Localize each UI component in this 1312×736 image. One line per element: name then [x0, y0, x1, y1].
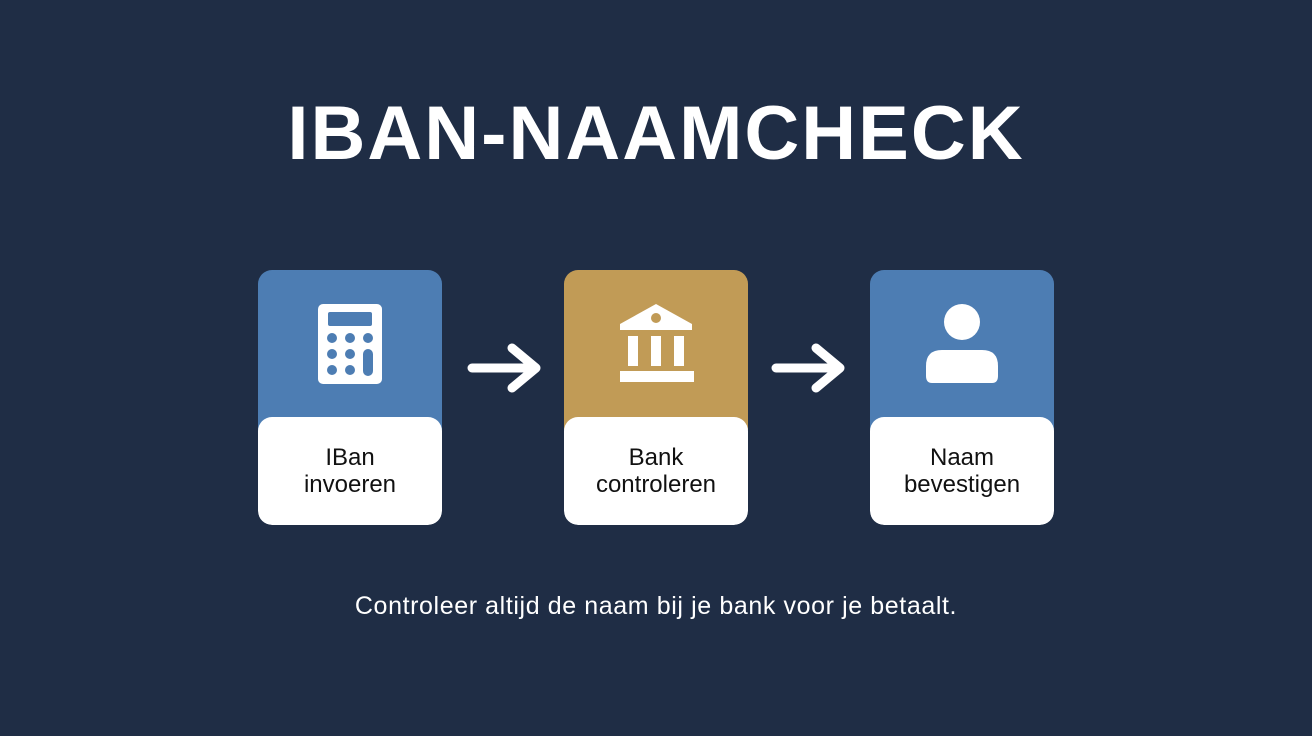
label: controleren [596, 471, 716, 498]
icon: calculator [318, 304, 382, 384]
card: IBAN invoeren [258, 270, 442, 525]
subtitle: Controleer altijd de naam bij je bank voor je betaalt. [355, 592, 957, 620]
label: bevestigen [904, 471, 1020, 498]
label [870, 417, 1054, 525]
label: invoeren [304, 471, 396, 498]
arrow 2 [772, 344, 844, 392]
label [564, 417, 748, 525]
card: bank controleren [564, 270, 748, 525]
arrow 1 [468, 344, 540, 392]
label: IBan [325, 444, 375, 471]
label: Bank [629, 444, 683, 471]
icon: bank [620, 304, 694, 382]
icon: person [926, 304, 998, 383]
label [258, 417, 442, 525]
card: naam bevestigen [870, 270, 1054, 525]
label: Naam [930, 444, 994, 471]
title: IBAN-NAAMCHECK [287, 91, 1025, 176]
